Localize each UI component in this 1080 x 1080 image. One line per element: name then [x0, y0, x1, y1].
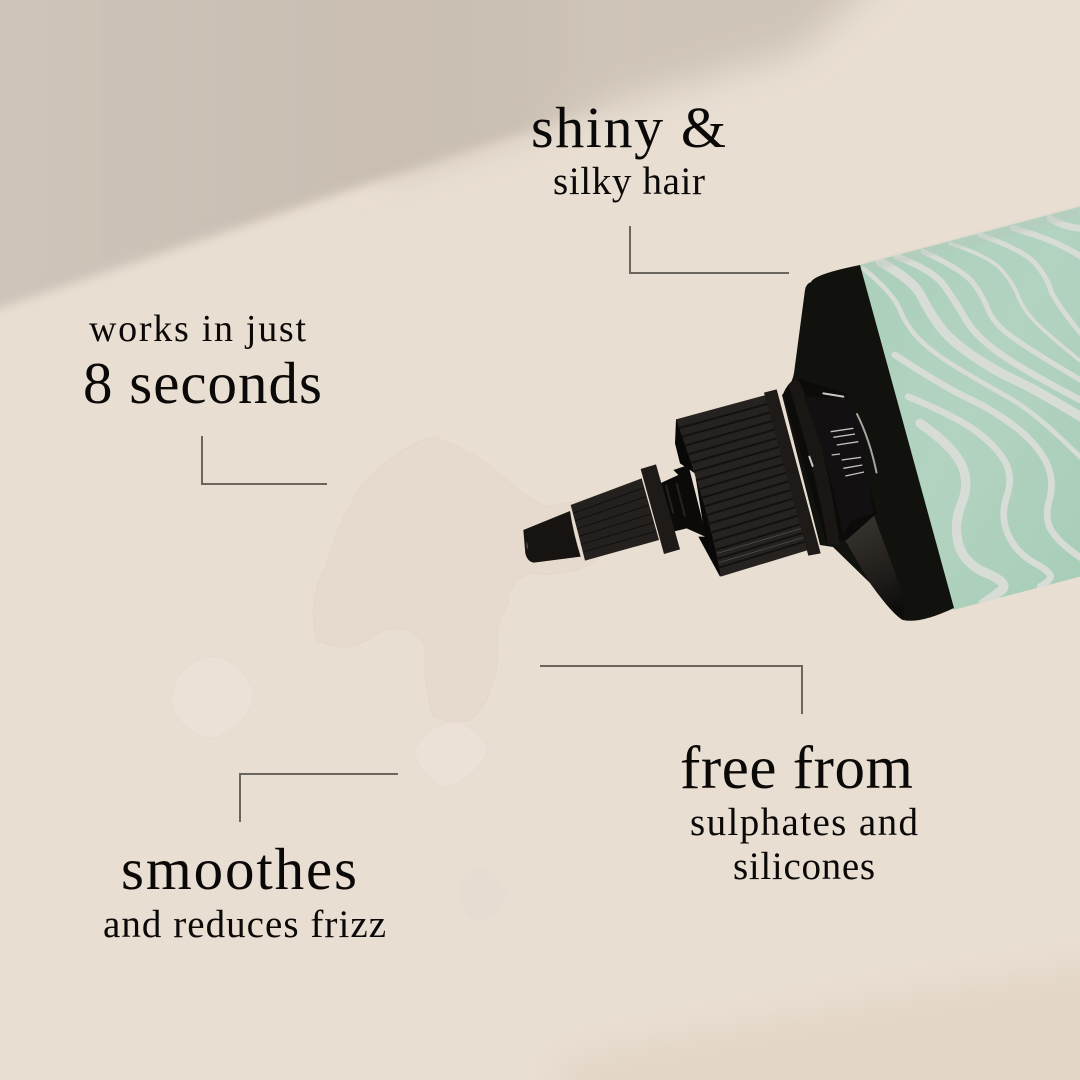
- callout line: seconds: [202, 436, 327, 484]
- knurl glints: [717, 528, 804, 563]
- callout line: free from: [540, 666, 802, 714]
- text: free from sulphates and silicones: silicones: [733, 845, 875, 888]
- shadow bottom right: [560, 960, 1080, 1080]
- puddle: [313, 437, 597, 722]
- text: works in just 8 seconds: works in just: [89, 308, 306, 350]
- silver arc: [857, 413, 877, 473]
- neck gloss line: [809, 393, 843, 466]
- nozzle tip: [523, 511, 581, 563]
- nozzle ribs: [574, 488, 656, 552]
- text: shiny and silky hair: [531, 95, 726, 203]
- callout line: shiny: [630, 226, 789, 273]
- callout line: smoothes: [240, 774, 398, 822]
- knurl ribs: [679, 404, 806, 568]
- neck ring: [788, 380, 840, 545]
- text: smoothes and reduces frizz: [103, 836, 386, 946]
- text: free from sulphates and silicones: [680, 735, 918, 888]
- shadow band top right soft: [380, 0, 980, 178]
- nozzle neck thread: [666, 483, 685, 517]
- spilled serum puddle: [171, 437, 597, 922]
- text: shiny and silky hair: silky hair: [553, 160, 705, 203]
- cap skirt: [764, 389, 821, 556]
- tube label: [860, 207, 1080, 610]
- text: works in just 8 seconds: 8 seconds: [83, 350, 322, 416]
- tip highlight: [527, 543, 528, 549]
- neck threads: [831, 428, 864, 476]
- nozzle neck: [660, 465, 707, 537]
- shoulder sheen: [842, 513, 905, 620]
- nozzle flange: [641, 464, 680, 554]
- tube shoulder: [782, 265, 954, 621]
- drop left: [171, 656, 253, 738]
- text: free from sulphates and silicones: sulphates and: [690, 801, 918, 844]
- neck block: [803, 396, 873, 535]
- drop centre: [415, 722, 488, 787]
- drop lower: [460, 867, 506, 922]
- text: works in just 8 seconds: [83, 308, 322, 416]
- shadow band top left: [0, 0, 640, 318]
- neck base fill: [783, 378, 877, 543]
- text: free from sulphates and silicones: free from: [680, 735, 913, 802]
- big cap knurl: [676, 395, 808, 577]
- text: shiny and silky hair: shiny &: [531, 95, 726, 160]
- nozzle: [523, 464, 707, 563]
- hub chamfer: [675, 413, 760, 577]
- nozzle knurl: [571, 478, 659, 561]
- cap and neck: [675, 378, 877, 577]
- text: smoothes and reduces frizz: and reduces frizz: [103, 903, 386, 946]
- text: smoothes and reduces frizz: smoothes: [121, 836, 357, 902]
